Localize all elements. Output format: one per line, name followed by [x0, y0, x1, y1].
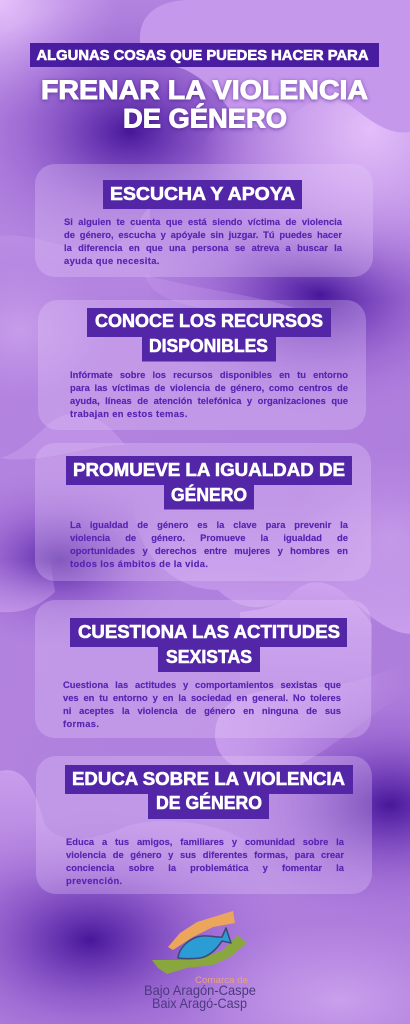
text: promueve la igualdad: todos los ámbitos de la vida. [70, 558, 208, 569]
heading: educa sobre la violencia de género: EDUCA SOBRE LA VIOLENCIA [72, 769, 345, 789]
text: logo name: Comarca de [195, 975, 248, 986]
text: educa sobre la violencia: prevención. [66, 875, 122, 886]
heading: cuestiona las actitudes sexistas [70, 618, 347, 672]
text: educa sobre la violencia: Educa a tus amigos, familiares y comunidad sobre la [66, 836, 344, 847]
text: cuestiona las actitudes: ves en tu entorno y en la sociedad en general. No toleres [63, 692, 341, 703]
text: promueve la igualdad [70, 519, 348, 569]
text: escucha y apoya: Si alguien te cuenta que está siendo víctima de violencia [64, 216, 342, 227]
heading: promueve la igualdad de género: GÉNERO [171, 484, 247, 505]
heading: escucha y apoya [103, 180, 302, 209]
icon: fish [178, 928, 231, 959]
heading: conoce los recursos disponibles [87, 308, 331, 362]
panel: promueve la igualdad [35, 443, 371, 581]
icon: orange shape [168, 911, 235, 950]
text: escucha y apoya: la diferencia en que una persona se atreva a buscar la [64, 242, 342, 253]
text: conoce los recursos: para las víctimas de violencia de género, como centros de [70, 382, 348, 393]
panel: cuestiona las actitudes [35, 600, 371, 738]
title: FRENAR LA VIOLENCIA [41, 75, 368, 105]
title [40, 75, 370, 134]
text: promueve la igualdad: La igualdad de género es la clave para prevenir la [70, 519, 348, 530]
heading: educa sobre la violencia de género: DE GÉNERO [156, 792, 262, 813]
banner: subtitle: ALGUNAS COSAS QUE PUEDES HACER PARA [36, 48, 369, 64]
heading: cuestiona las actitudes sexistas: CUESTIONA LAS ACTITUDES [78, 622, 340, 642]
text: cuestiona las actitudes: Cuestiona las actitudes y comportamientos sexistas que [63, 679, 341, 690]
logo: comarca: Baix Aragó-Casp [152, 995, 247, 1011]
icon: green shape [152, 935, 247, 974]
panel: educa sobre la violencia [36, 756, 372, 894]
text: conoce los recursos: trabajan en estos temas. [70, 408, 188, 419]
text: escucha y apoya [64, 216, 342, 266]
text: conoce los recursos: ayuda, líneas de atención telefónica y organizaciones que [70, 395, 348, 406]
text: promueve la igualdad: violencia de género. Promueve la igualdad de [70, 532, 348, 543]
text: cuestiona las actitudes [63, 679, 341, 729]
text: educa sobre la violencia: conciencia sobre la problemática y fomentar la [66, 862, 344, 873]
heading: escucha y apoya: ESCUCHA Y APOYA [110, 184, 295, 204]
text: escucha y apoya: ayuda que necesita. [64, 255, 160, 266]
text: escucha y apoya: de género, escucha y apóyale sin juzgar. Tú puedes hacer [64, 229, 342, 240]
text: cuestiona las actitudes: ni aceptes la violencia de género en ninguna de sus [63, 705, 341, 716]
heading: conoce los recursos disponibles: DISPONIBLES [149, 336, 268, 356]
heading: conoce los recursos disponibles: CONOCE LOS RECURSOS [95, 311, 323, 331]
panel: escucha y apoya [35, 164, 373, 277]
logo: comarca: Bajo Aragón-Caspe [144, 982, 256, 998]
heading: promueve la igualdad de género: PROMUEVE LA IGUALDAD DE [73, 460, 345, 480]
heading: promueve la igualdad de género [66, 456, 352, 510]
text: educa sobre la violencia [66, 836, 344, 886]
text: educa sobre la violencia: violencia de género y sus diferentes formas, para crear [66, 849, 344, 860]
title: DE GÉNERO [123, 104, 287, 134]
heading: cuestiona las actitudes sexistas: SEXISTAS [166, 647, 252, 667]
text: conoce los recursos [70, 369, 348, 420]
panel: conoce los recursos [38, 300, 366, 430]
text: cuestiona las actitudes: formas. [63, 718, 99, 729]
text: conoce los recursos: Infórmate sobre los recursos disponibles en tu entorno [70, 369, 348, 380]
text: promueve la igualdad: oportunidades y derechos entre mujeres y hombres en [70, 545, 348, 556]
banner: subtitle [30, 43, 379, 67]
